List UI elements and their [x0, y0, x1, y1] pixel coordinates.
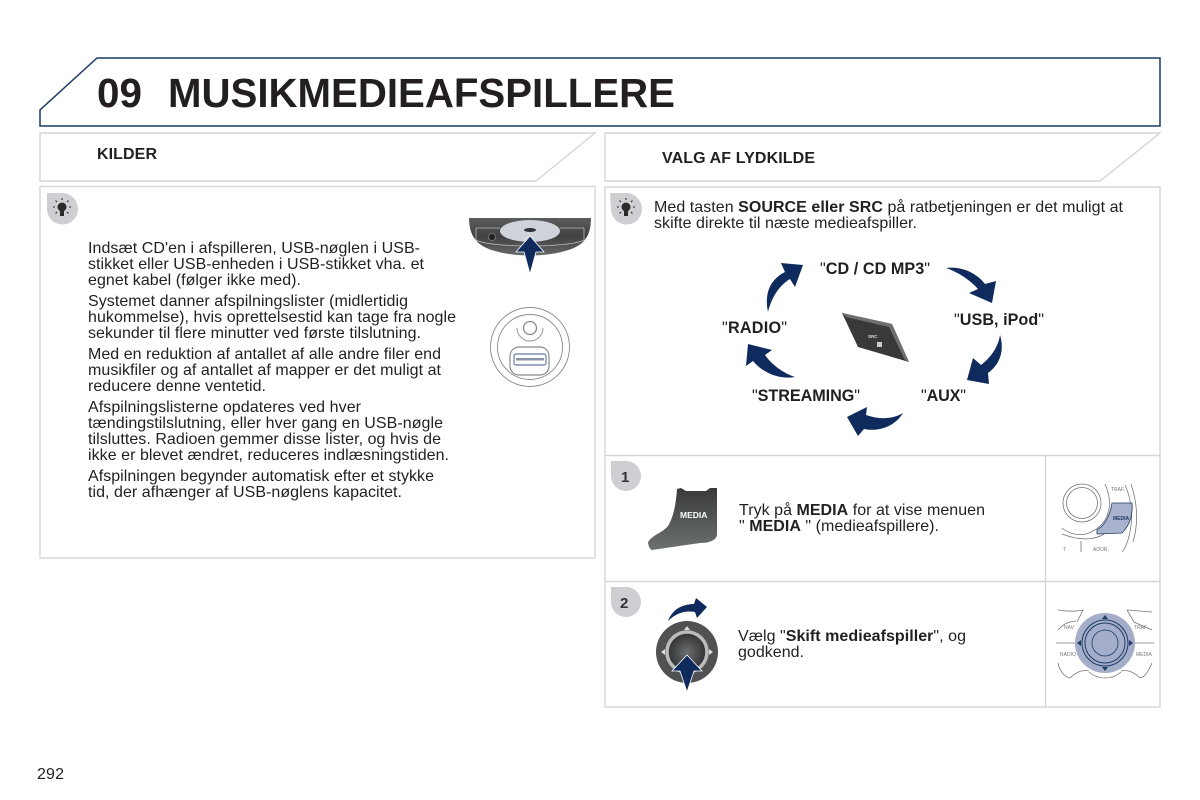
intro text: [654, 198, 1124, 232]
intro text: skifte direkte til næste medieafspiller.: [654, 215, 917, 232]
schematic: rotary control: NAV: [1064, 625, 1075, 631]
schematic: rotary control: [1056, 610, 1154, 678]
badge: 1: 1: [621, 469, 629, 486]
body text: KILDER: egnet kabel (følger ikke med).: [88, 272, 301, 289]
icon: CD player with disc and arrow: [469, 218, 591, 274]
label: USB, iPod: "USB, iPod": [954, 311, 1044, 329]
arrow: streaming to radio: [746, 344, 795, 378]
body text: KILDER: ikke er blevet ændret, reduceres indlæsningstiden.: [88, 447, 449, 464]
icon: rotary joystick with arrows: [656, 598, 718, 692]
heading: KILDER: KILDER: [97, 146, 157, 163]
arrow: USB to AUX: [967, 335, 1002, 384]
schematic: rotary control: TRAF.: [1134, 625, 1148, 631]
step 2 text: Vælg "Skift medieafspiller", og: [738, 628, 966, 645]
chapter header banner: [40, 58, 1160, 126]
body text: KILDER: stikket eller USB-enheden i USB-stikket vha. et: [88, 256, 425, 273]
schematic: MEDIA button location: ADOR.: [1093, 547, 1109, 553]
step 1 text: " MEDIA " (medieafspillere).: [739, 518, 939, 535]
arrow: radio to CD: [767, 263, 803, 312]
body text: KILDER: Systemet danner afspilningslister (midlertidig: [88, 293, 408, 310]
icon: SRC steering wheel button: SRC: [868, 334, 878, 339]
body text: KILDER: Afspilningen begynder automatisk efter et stykke: [88, 468, 434, 485]
step 2 text: godkend.: [738, 644, 804, 661]
badge: 1: [611, 461, 641, 491]
step 1 text: [739, 501, 985, 535]
schematic: MEDIA button location: MEDIA: [1113, 516, 1130, 522]
body text: KILDER: tilsluttes. Radioen gemmer disse lister, og hvis de: [88, 431, 441, 448]
schematic: MEDIA button location: T: [1063, 547, 1066, 553]
icon: MEDIA button: MEDIA: [680, 510, 707, 520]
body text: KILDER: tid, der afhænger af USB-nøglens kapacitet.: [88, 484, 402, 501]
label: AUX: "AUX": [921, 387, 966, 405]
cycle diagram of audio sources: [722, 260, 1044, 436]
icon: USB socket: [490, 308, 570, 386]
schematic: MEDIA button location: TRAF.: [1111, 487, 1125, 493]
intro text: Med tasten SOURCE eller SRC på ratbetjeningen er det muligt at: [654, 198, 1124, 216]
badge: 2: [611, 587, 641, 617]
body text: KILDER: Med en reduktion af antallet af alle andre filer end: [88, 346, 441, 363]
heading: VALG AF LYDKILDE: [605, 133, 1160, 181]
body text: KILDER: musikfiler og af antallet af mapper er det muligt at: [88, 362, 442, 379]
body text: KILDER: reducere denne ventetid.: [88, 378, 266, 395]
schematic: MEDIA button location: [1062, 484, 1137, 553]
icon: tip light bulb: [47, 193, 78, 224]
label: RADIO: "RADIO": [722, 319, 787, 337]
body text: KILDER: Afspilningslisterne opdateres ved hver: [88, 399, 362, 416]
schematic: rotary control: MEDIA: [1136, 652, 1152, 658]
label: STREAMING: "STREAMING": [752, 387, 860, 405]
page title: MUSIKMEDIEAFSPILLERE: [168, 70, 675, 116]
arrow: AUX to streaming: [847, 407, 903, 436]
body text: KILDER: [88, 240, 456, 501]
icon: tip light bulb: [610, 193, 642, 224]
icon: SRC steering wheel button: [842, 313, 909, 362]
body text: KILDER: Indsæt CD'en i afspilleren, USB-nøglen i USB-: [88, 240, 420, 257]
badge: 2: 2: [620, 595, 628, 612]
panel: KILDER: [40, 186, 595, 558]
schematic: rotary control: RADIO: [1060, 652, 1076, 658]
page number: 292: [37, 766, 64, 783]
step 2: [611, 587, 1154, 692]
arrow: CD to USB: [946, 268, 996, 303]
heading: KILDER: [40, 133, 595, 181]
body text: KILDER: sekunder til flere minutter ved første tilslutning.: [88, 325, 421, 342]
step 1: [611, 461, 1137, 553]
step 1 text: Tryk på MEDIA for at vise menuen: [739, 501, 985, 519]
chapter number: 09: [97, 70, 142, 116]
step 2 text: [738, 628, 966, 661]
icon: MEDIA button: [648, 488, 717, 550]
label: CD / CD MP3: "CD / CD MP3": [820, 260, 930, 278]
heading: VALG AF LYDKILDE: VALG AF LYDKILDE: [662, 150, 815, 167]
body text: KILDER: hukommelse), hvis oprettelsestid kan tage fra nogle: [88, 309, 456, 326]
panel: VALG AF LYDKILDE: [605, 187, 1160, 707]
body text: KILDER: tændingstilslutning, eller hver gang en USB-nøgle: [88, 415, 443, 432]
